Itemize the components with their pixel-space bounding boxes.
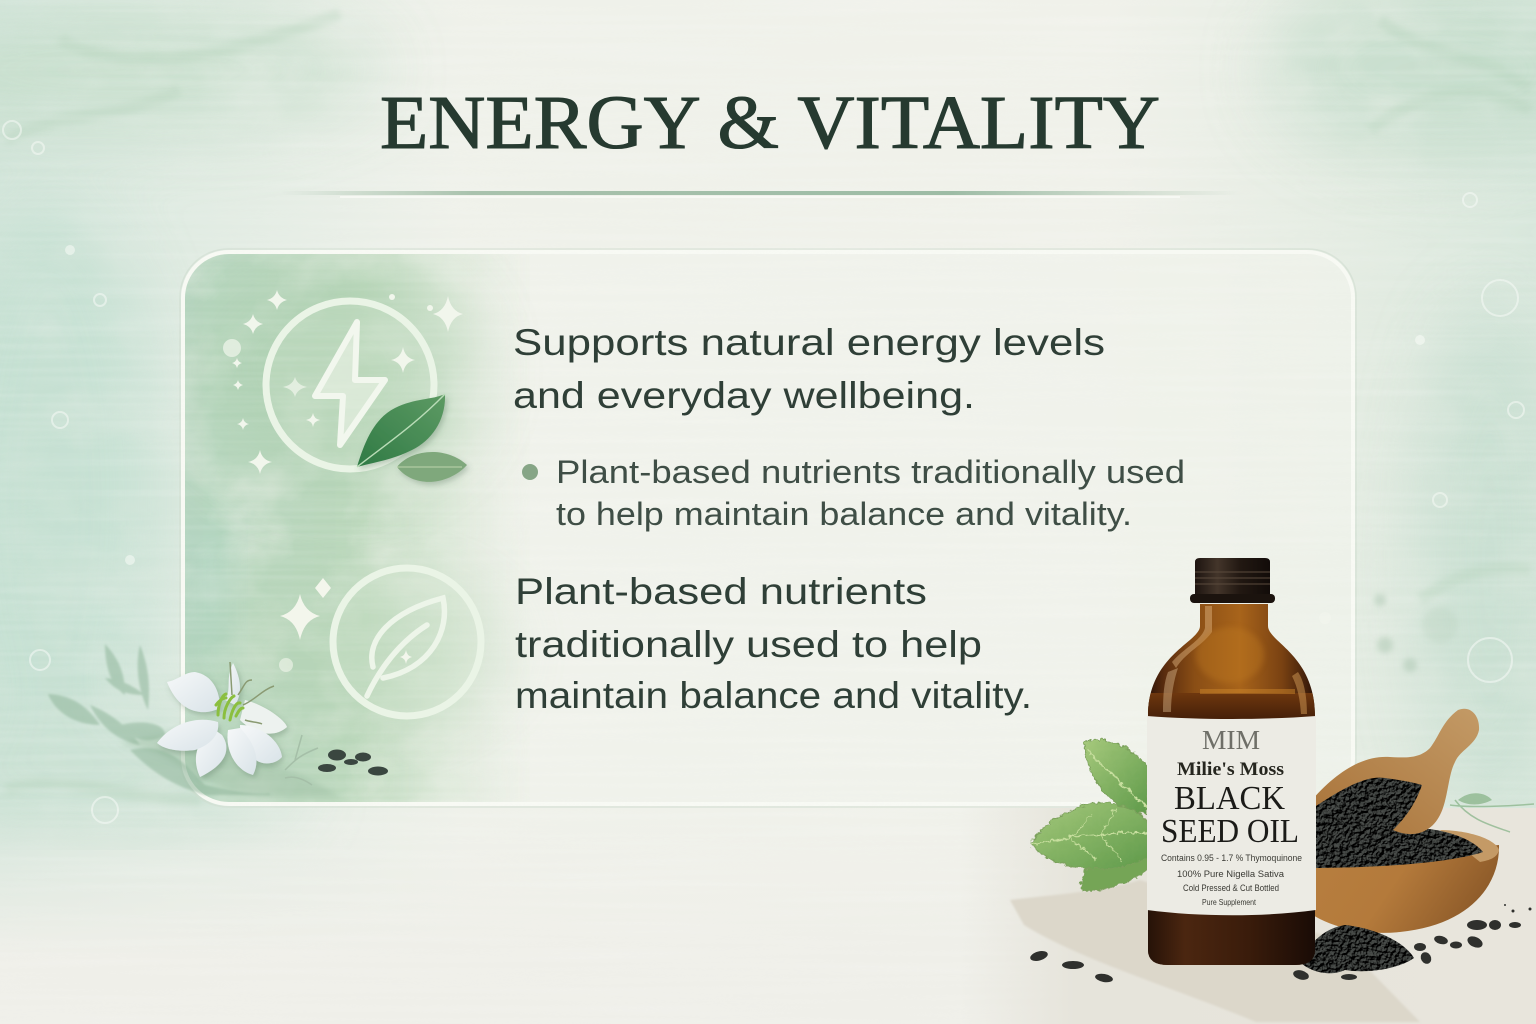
background sprig	[1450, 793, 1534, 832]
bottle label: Cold Pressed & Cut Bottled	[1183, 883, 1279, 893]
sparkle mist	[1374, 594, 1458, 672]
bottle glass	[1148, 604, 1315, 965]
text: supports natural energy: and everyday wellbeing.	[513, 375, 975, 416]
panel: main content card	[150, 230, 1356, 830]
bottle label: Pure Supplement	[1202, 898, 1257, 907]
bullet text: to help maintain balance and vitality.	[556, 496, 1132, 532]
bullet dot	[522, 464, 538, 480]
small leaf	[397, 452, 467, 482]
text: plant-based nutrients: maintain balance and vitality.	[515, 675, 1032, 716]
green wash	[120, 735, 340, 797]
icon: lightning bolt in circle with leaves	[223, 290, 467, 482]
sprig	[285, 735, 318, 785]
bottle label: 100% Pure Nigella Sativa	[1177, 869, 1284, 879]
bullet text	[556, 454, 1185, 532]
seeds in scoop	[1310, 778, 1422, 862]
text: plant-based nutrients	[515, 571, 1032, 716]
bottle	[1140, 558, 1320, 970]
stone surface	[960, 808, 1536, 1024]
product still life	[960, 558, 1536, 1024]
title: ENERGY & VITALITY	[380, 81, 1160, 165]
bullet point	[522, 454, 1185, 532]
stamens	[230, 662, 274, 724]
wooden scoop	[1310, 709, 1479, 862]
wooden bowl	[1300, 845, 1499, 933]
black seeds on panel	[318, 750, 388, 776]
seed pile	[1300, 925, 1414, 973]
petals	[157, 663, 287, 777]
bottle label: SEED OIL	[1161, 813, 1299, 850]
foliage	[48, 644, 270, 795]
text: plant-based nutrients: traditionally used to help	[515, 624, 982, 665]
bullet text: Plant-based nutrients traditionally used	[556, 454, 1185, 490]
bottle label: BLACK	[1174, 780, 1285, 817]
illustration: nigella flower and foliage	[48, 644, 340, 797]
cloth	[1010, 880, 1420, 1022]
text: supports natural energy: Supports natural energy levels	[513, 322, 1105, 363]
large leaf	[357, 394, 445, 467]
text: supports natural energy	[513, 322, 1105, 416]
mint leaves	[1029, 738, 1147, 889]
lightning bolt	[315, 322, 385, 445]
bottle label	[1147, 716, 1316, 915]
text: plant-based nutrients: Plant-based nutrients	[515, 571, 927, 612]
scattered seeds	[1029, 904, 1532, 984]
bottle label: Milie's Moss	[1177, 759, 1284, 780]
icon: leaf in circle	[279, 568, 481, 716]
seeds in bowl	[1306, 828, 1483, 868]
sparkles	[223, 290, 463, 474]
bottle label: Contains 0.95 - 1.7 % Thymoquinone	[1161, 853, 1302, 863]
bottle label: MIM	[1202, 725, 1260, 755]
bottle cap	[1190, 558, 1275, 603]
leaf outline	[367, 598, 444, 696]
sparkles	[279, 578, 412, 672]
title divider	[280, 191, 1240, 198]
